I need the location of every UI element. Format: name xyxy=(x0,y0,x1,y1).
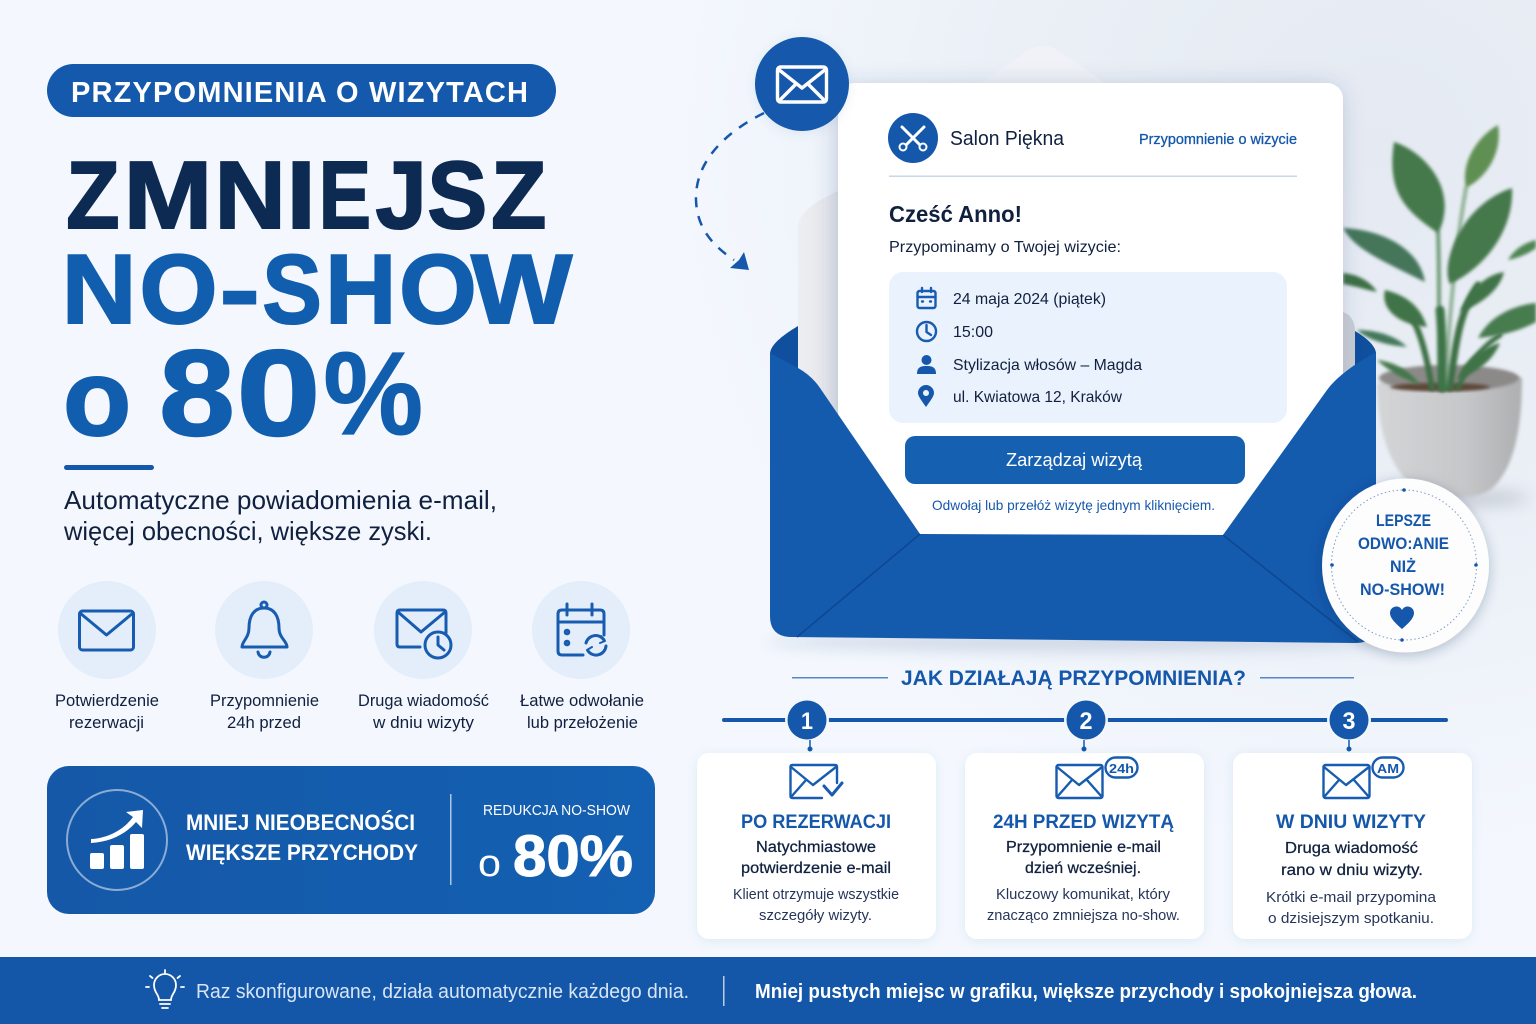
main title: O xyxy=(140,234,218,344)
panel: step 3: rano w dniu wizyty. xyxy=(1281,862,1423,879)
icon: growth chart xyxy=(90,810,144,869)
main title: Z xyxy=(66,142,120,249)
panel: benefits banner: o xyxy=(478,843,501,885)
icon: envelope 24h xyxy=(1056,758,1138,798)
icon: envelope AM xyxy=(1324,758,1404,798)
feature: booking confirmation: rezerwacji xyxy=(69,714,144,732)
main title: J xyxy=(376,142,427,249)
subtitle: Automatyczne powiadomienia e-mail, xyxy=(64,485,497,515)
feature: second message xyxy=(358,581,489,732)
salon logo xyxy=(888,113,938,163)
main title: S xyxy=(262,234,322,344)
email card: Przypominamy o Twojej wizycie: xyxy=(889,239,1121,256)
main title: S xyxy=(427,142,487,249)
badge: better cancel than no-show: NO-SHOW! xyxy=(1360,581,1445,599)
panel: step 3: o dzisiejszym spotkaniu. xyxy=(1268,911,1434,927)
panel: step 2: Kluczowy komunikat, który xyxy=(996,887,1171,903)
appointment details: Stylizacja włosów – Magda xyxy=(953,357,1142,374)
feature: easy cancel xyxy=(520,581,644,732)
icon: envelope xyxy=(80,611,134,650)
icon: light bulb xyxy=(146,970,184,1008)
illustration: envelope with email card xyxy=(765,46,1385,650)
icon: clock xyxy=(917,322,936,341)
button xyxy=(905,436,1245,484)
icon: envelope with check xyxy=(790,765,842,798)
icon: mail circle xyxy=(755,37,849,131)
plant in pot xyxy=(1343,125,1536,506)
main title: O xyxy=(399,234,477,344)
panel: step 1: potwierdzenie e-mail xyxy=(741,860,891,877)
email card: Cześć Anno! xyxy=(889,201,1022,227)
footer band xyxy=(0,957,1536,1024)
panel: benefits banner: WIĘKSZE PRZYCHODY xyxy=(186,840,418,865)
feature: second message: Druga wiadomość xyxy=(358,692,489,710)
email card: Salon Piękna xyxy=(950,128,1065,150)
badge: better cancel than no-show: LEPSZE xyxy=(1376,512,1431,530)
icon: heart xyxy=(1390,606,1414,629)
panel: step 2: Przypomnienie e-mail xyxy=(1006,839,1161,856)
step 2 marker: 2 xyxy=(1080,708,1092,735)
feature: second message: w dniu wizyty xyxy=(372,714,475,732)
step 1 marker: 1 xyxy=(801,708,813,735)
main title: Z xyxy=(491,142,546,249)
appointment details: 24 maja 2024 (piątek) xyxy=(953,291,1106,308)
icon: envelope with clock xyxy=(397,610,451,658)
panel: step 2: dzień wcześniej. xyxy=(1025,860,1141,877)
panel: step 2: 24H PRZED WIZYTĄ xyxy=(993,812,1174,833)
footer band: Raz skonfigurowane, działa automatycznie każdego dnia. xyxy=(196,981,689,1003)
email card xyxy=(838,83,1343,553)
main title: N xyxy=(215,142,286,249)
step 2 marker xyxy=(1064,698,1108,752)
icon: bell xyxy=(242,602,287,657)
feature: 24h reminder: Przypomnienie xyxy=(210,692,319,710)
feature: booking confirmation xyxy=(55,581,159,732)
envelope front xyxy=(770,352,1376,643)
badge: better cancel than no-show: ODWO:ANIE xyxy=(1358,535,1449,553)
arrow: dashed path from mail icon xyxy=(696,113,764,270)
main title: W xyxy=(471,234,573,344)
pill heading xyxy=(47,64,556,117)
icon: person xyxy=(917,355,936,374)
timeline xyxy=(722,698,1448,752)
subtitle xyxy=(63,485,497,546)
panel: step 1: szczegóły wizyty. xyxy=(759,908,872,924)
appointment details: ul. Kwiatowa 12, Kraków xyxy=(953,389,1122,406)
icon: location pin xyxy=(918,385,934,407)
email card: Przypomnienie o wizycie xyxy=(1139,132,1297,148)
subtitle: więcej obecności, większe zyski. xyxy=(63,516,432,546)
section heading: JAK DZIAŁAJĄ PRZYPOMNIENIA? xyxy=(901,667,1246,690)
panel: step 3 xyxy=(1233,753,1472,939)
badge: better cancel than no-show: NIŻ xyxy=(1390,558,1416,576)
panel: step 3: Krótki e-mail przypomina xyxy=(1266,890,1437,906)
panel: step 3: W DNIU WIZYTY xyxy=(1276,812,1426,833)
feature: easy cancel: Łatwe odwołanie xyxy=(520,692,644,710)
footer band: Mniej pustych miejsc w grafiku, większe przychody i spokojniejsza głowa. xyxy=(755,981,1417,1003)
main title: M xyxy=(124,142,212,249)
main title: 8 xyxy=(159,325,235,461)
main title: % xyxy=(323,328,423,460)
feature: booking confirmation: Potwierdzenie xyxy=(55,692,159,710)
main title: I xyxy=(287,142,316,249)
appointment details xyxy=(889,272,1287,423)
step 1 marker xyxy=(785,698,829,752)
main title: 0 xyxy=(236,325,320,461)
panel: step 1: Natychmiastowe xyxy=(756,839,876,856)
main title: N xyxy=(62,234,136,344)
appointment details: 15:00 xyxy=(953,324,993,341)
panel: benefits banner xyxy=(47,766,655,914)
panel: benefits banner: REDUKCJA NO-SHOW xyxy=(483,803,630,819)
pill heading: PRZYPOMNIENIA O WIZYTACH xyxy=(71,77,528,109)
panel: step 1: Klient otrzymuje wszystkie xyxy=(733,887,899,903)
panel: benefits banner: MNIEJ NIEOBECNOŚCI xyxy=(186,810,415,835)
badge: better cancel than no-show xyxy=(1322,478,1489,652)
panel: step 3: AM xyxy=(1377,761,1399,776)
button: Zarządzaj wizytą xyxy=(1006,450,1143,470)
icon: calendar with refresh xyxy=(558,604,606,655)
main title: o xyxy=(63,337,131,458)
panel: step 2: znacząco zmniejsza no-show. xyxy=(987,908,1180,924)
main title: H xyxy=(325,234,396,344)
main title: - xyxy=(220,234,260,344)
panel: step 1: PO REZERWACJI xyxy=(741,812,891,833)
main title: E xyxy=(319,142,371,249)
panel: step 2: 24h xyxy=(1109,761,1134,776)
panel: step 1 xyxy=(697,753,936,939)
icon: calendar xyxy=(918,288,936,308)
main title xyxy=(62,142,573,461)
panel: step 3: Druga wiadomość xyxy=(1285,840,1418,857)
feature: 24h reminder xyxy=(210,581,319,732)
panel: step 2 xyxy=(965,753,1204,939)
feature: 24h reminder: 24h przed xyxy=(227,714,301,732)
step 3 marker: 3 xyxy=(1342,708,1356,735)
feature: easy cancel: lub przełożenie xyxy=(527,714,638,732)
email card: Odwołaj lub przełóż wizytę jednym kliknięciem. xyxy=(932,497,1215,513)
step 3 marker xyxy=(1327,698,1371,752)
panel: benefits banner: 80% xyxy=(513,824,633,889)
